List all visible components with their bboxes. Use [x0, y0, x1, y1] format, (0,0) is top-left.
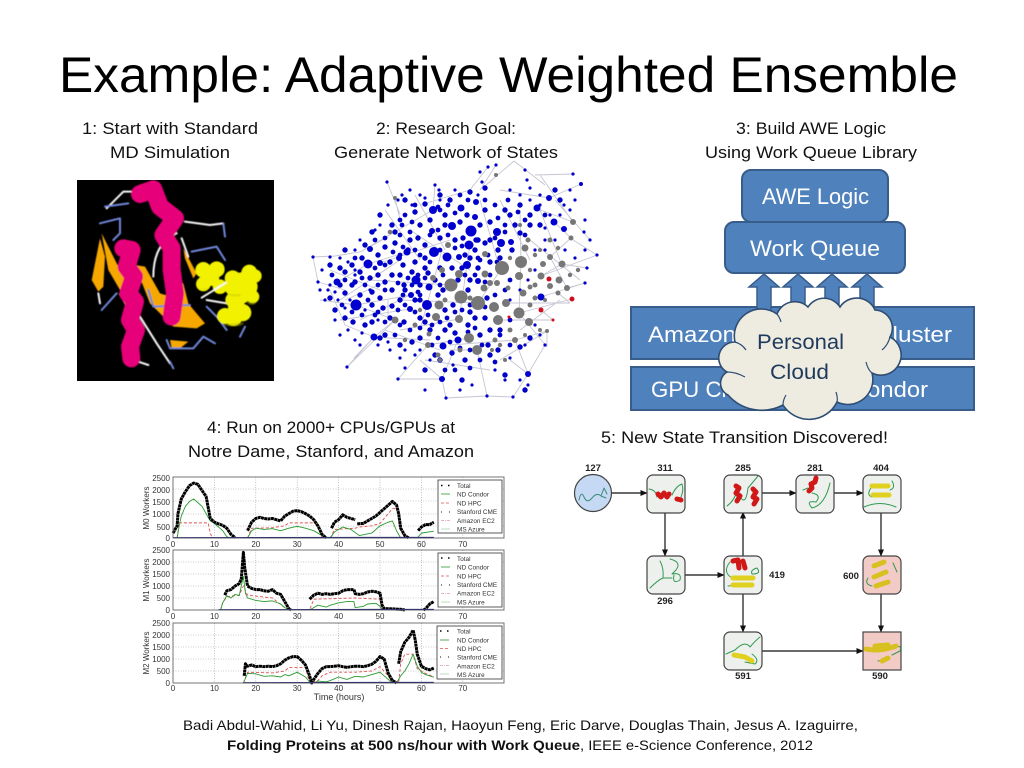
chart: M2 workers: 40 — [334, 684, 344, 693]
citation: Folding Proteins at 500 ns/hour with Work Queue — [227, 737, 580, 753]
chart: M2 workers: 30 — [293, 684, 302, 693]
chart: M1 workers: 1000 — [152, 582, 171, 591]
caption: step 1: 1: Start with Standard — [82, 120, 258, 138]
chart: M2 workers: 1500 — [152, 643, 171, 652]
chart: M2 workers: 500 — [157, 667, 171, 676]
legend: Stanford CME — [457, 654, 497, 662]
chart: M2 workers: 2000 — [152, 631, 171, 640]
work queue architecture diagram — [631, 170, 974, 419]
chart: M2 workers: Time (hours) — [314, 692, 364, 702]
state 419: 419 — [769, 570, 785, 581]
caption: step 1 — [82, 120, 258, 162]
legend: ND Condor — [457, 638, 490, 644]
chart: M0 workers: 0 — [166, 534, 171, 543]
chart: M1 workers: 0 — [171, 612, 176, 621]
state 281: 281 — [807, 463, 824, 474]
state 285: 285 — [735, 463, 752, 474]
state 419 — [724, 556, 785, 594]
chart: M1 workers: 30 — [293, 612, 302, 621]
chart: M0 workers — [142, 474, 504, 549]
legend: MS Azure — [457, 526, 485, 534]
legend: Total — [457, 556, 470, 563]
state 296: 296 — [657, 596, 673, 607]
state 311 — [647, 463, 685, 513]
chart: M1 workers: 70 — [458, 612, 468, 621]
legend: ND HPC — [457, 500, 482, 508]
legend: Amazon EC2 — [457, 518, 495, 525]
arrows between states — [612, 493, 881, 651]
cloud: Personal Cloud: Cloud — [770, 361, 829, 384]
citation — [183, 717, 858, 753]
chart: M0 workers: 40 — [334, 540, 344, 549]
caption: step 3: Using Work Queue Library — [705, 144, 918, 162]
caption: step 4 — [188, 419, 474, 461]
chart: M2 workers — [142, 619, 504, 702]
chart: M2 workers: 2500 — [152, 619, 171, 628]
caption: step 2: Generate Network of States — [334, 144, 558, 162]
box: Work Queue: Work Queue — [750, 236, 880, 261]
protein structure image — [77, 180, 274, 381]
state 127 — [574, 463, 612, 512]
chart: M2 workers: 60 — [417, 684, 426, 693]
chart: M0 workers: 1500 — [152, 498, 171, 507]
chart: M2 workers: 10 — [210, 684, 219, 693]
chart: M1 workers: 2000 — [152, 558, 171, 567]
chart: M1 workers: M1 Workers — [142, 559, 151, 601]
chart: M1 workers: 500 — [157, 594, 171, 603]
chart: M1 workers: 60 — [417, 612, 426, 621]
legend: Stanford CME — [457, 582, 497, 589]
caption: step 2: 2: Research Goal: — [376, 120, 516, 138]
legend: Total — [457, 628, 470, 636]
state 404 — [863, 463, 901, 513]
box: Amazon and cluster layer — [631, 307, 974, 359]
legend: Amazon EC2 — [457, 664, 495, 670]
caption: step 3: 3: Build AWE Logic — [736, 120, 886, 138]
chart: M0 workers: 500 — [157, 523, 171, 532]
caption: step 4: 4: Run on 2000+ CPUs/GPUs at — [207, 419, 455, 437]
chart: M1 workers: 50 — [376, 612, 385, 621]
state 591: 591 — [735, 671, 752, 682]
caption: step 3 — [705, 120, 918, 162]
chart: M1 workers: 1500 — [152, 570, 171, 579]
legend: ND HPC — [457, 646, 482, 653]
legend — [437, 626, 502, 679]
arrows: workers to work queue — [749, 274, 882, 315]
box: GPU cluster and Condor layer — [631, 367, 974, 410]
chart: M2 workers: 0 — [166, 679, 171, 688]
chart: M0 workers: 2500 — [152, 474, 171, 483]
chart: M2 workers: 70 — [458, 684, 468, 693]
state 590 — [863, 632, 901, 682]
state 281 — [796, 463, 834, 513]
chart: M0 workers: 70 — [458, 540, 468, 549]
chart: M0 workers: 2000 — [152, 486, 171, 495]
cloud: Personal Cloud — [719, 298, 901, 419]
chart: M2 workers: 50 — [376, 684, 385, 693]
state 296 — [647, 556, 685, 607]
state 600 — [843, 556, 901, 594]
citation: , IEEE e-Science Conference, 2012 — [580, 737, 813, 753]
chart: M1 workers — [142, 546, 504, 621]
chart: M2 workers: M2 Workers — [142, 632, 151, 674]
chart: M0 workers: M0 Workers — [142, 487, 151, 529]
title: Example: Adaptive Weighted Ensemble — [59, 47, 958, 103]
chart: M0 workers: 1000 — [152, 510, 171, 519]
box: GPU cluster and Condor layer: Condor — [850, 377, 928, 402]
chart: M1 workers: 0 — [166, 606, 171, 615]
legend — [438, 553, 502, 607]
chart: M0 workers: 50 — [376, 540, 385, 549]
legend: ND Condor — [457, 564, 490, 572]
chart: M2 workers: 0 — [171, 684, 176, 693]
chart: M0 workers: 0 — [171, 540, 176, 549]
legend: Total — [457, 483, 470, 490]
chart: M2 workers: 20 — [251, 684, 261, 693]
box: GPU cluster and Condor layer: GPU Cluster — [651, 377, 776, 402]
chart: M1 workers: 10 — [210, 612, 219, 621]
state 404: 404 — [873, 463, 890, 474]
state 311: 311 — [657, 463, 673, 474]
cloud: Personal Cloud: Personal — [757, 331, 844, 354]
state 591 — [724, 632, 762, 682]
legend: MS Azure — [457, 600, 485, 606]
caption: step 4: Notre Dame, Stanford, and Amazon — [188, 443, 474, 461]
box: Work Queue — [725, 222, 905, 273]
box: AWE Logic: AWE Logic — [762, 184, 869, 209]
caption: step 2 — [334, 120, 558, 162]
legend: ND Condor — [457, 492, 490, 498]
chart: M2 workers: 1000 — [152, 655, 171, 664]
chart: M1 workers: 40 — [334, 612, 344, 621]
chart: M0 workers: 10 — [210, 540, 219, 549]
chart: M0 workers: 30 — [293, 540, 302, 549]
box: Amazon and cluster layer: Amazon — [648, 322, 736, 347]
chart: M0 workers: 20 — [251, 540, 261, 549]
state 590: 590 — [872, 671, 888, 682]
legend: Stanford CME — [457, 509, 497, 516]
box: Amazon and cluster layer: Cluster — [875, 322, 952, 347]
state transition network — [574, 463, 901, 682]
chart: M1 workers: 20 — [251, 612, 261, 621]
chart: M1 workers: 2500 — [152, 546, 171, 555]
chart: M0 workers: 60 — [417, 540, 426, 549]
state 285 — [724, 463, 762, 513]
legend: Amazon EC2 — [457, 590, 495, 598]
caption: step 1: MD Simulation — [110, 144, 230, 162]
network of states graph — [313, 161, 597, 398]
citation: Badi Abdul-Wahid, Li Yu, Dinesh Rajan, Haoyun Feng, Eric Darve, Douglas Thain, Jesus A. Izaguirre, — [183, 717, 858, 733]
state 600: 600 — [843, 571, 859, 582]
state 127: 127 — [585, 463, 601, 474]
caption: step 5: 5: New State Transition Discovered! — [601, 429, 888, 447]
legend: ND HPC — [457, 574, 482, 580]
box: AWE Logic — [742, 170, 888, 222]
legend — [438, 480, 502, 534]
legend: MS Azure — [457, 672, 485, 679]
